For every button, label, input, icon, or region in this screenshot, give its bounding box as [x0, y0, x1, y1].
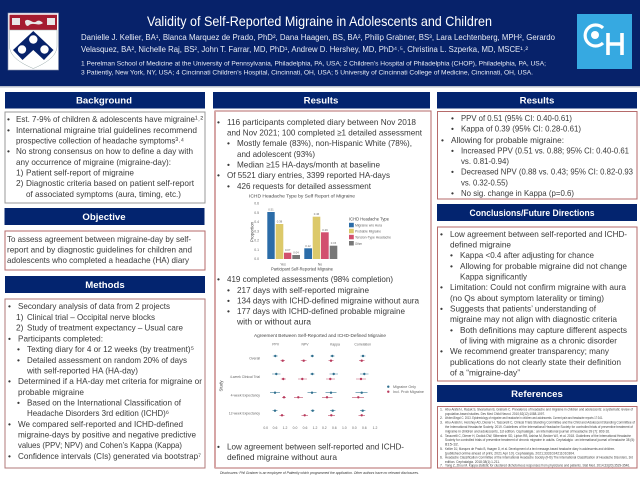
objective text: [7, 234, 192, 265]
heading: background: [5, 92, 205, 108]
forest plot: agreement between self-reported and ICHD-defined migraine: Correlation: [354, 342, 371, 346]
results text: assessments: with or without aura: [236, 316, 311, 326]
bar chart: ICHD headache type by self-report of migraine: 0.2: [254, 238, 259, 242]
methods text: Participants completed:: [18, 334, 103, 344]
results continued text: •: [451, 166, 454, 176]
forest plot: agreement between self-reported and ICHD-defined migraine: 4-week Clinical Trial: [230, 375, 260, 379]
methods text: •: [8, 419, 11, 429]
conclusions text: Low agreement between self-reported and ICHD-: [450, 229, 627, 239]
methods text: migraine-days by positive and negative predictive: [18, 430, 196, 440]
methods text: values (PPV; NPV) and Cohen’s Kappa (Kappa): [18, 440, 182, 450]
bar chart: ICHD headache type by self-report of migraine: 0.0: [254, 257, 259, 261]
forest plot: agreement between self-reported and ICHD-defined migraine: 1.2: [313, 426, 317, 430]
bar chart: ICHD headache type by self-report of migraine: ICHD Headache Type by Self Report of Migraine: [249, 194, 356, 198]
heading: methods: Methods: [85, 280, 125, 291]
conclusions text: Kappa <0.4 after adjusting for chance: [460, 250, 594, 260]
results text: participants: •: [217, 170, 220, 180]
methods text: •: [8, 376, 11, 386]
bar chart: ICHD headache type by self-report of migraine: 0.12: [305, 244, 311, 248]
references text: [440, 408, 635, 468]
conclusions text: Both definitions may capture different aspects: [460, 325, 627, 335]
forest plot: agreement between self-reported and ICHD-defined migraine: Study: [218, 380, 224, 392]
panel: references: [437, 385, 637, 468]
results text: assessments: 217 days with self-reported migraine: [237, 285, 369, 295]
conclusions text: •: [440, 229, 443, 239]
background text: •: [7, 125, 10, 135]
panel: background: [5, 92, 205, 203]
results text: participants: and adolescent (93%): [237, 149, 315, 159]
conclusions text: Suggests that patients’ understanding of: [450, 304, 597, 314]
bar chart: ICHD headache type by self-report of migraine: 0.07: [285, 248, 291, 252]
heading: objective: Objective: [82, 212, 126, 223]
results text box: [214, 111, 431, 468]
conclusions text: [440, 229, 627, 378]
conclusions text: •: [450, 261, 453, 271]
results text: participants: •: [227, 181, 230, 191]
results text: participants: and Nov 2021; 100 completed ≥1 detailed assessment: [227, 128, 423, 138]
bar chart: ICHD headache type by self-report of migraine: 0.4: [254, 220, 259, 224]
bar chart: ICHD headache type by self-report of migraine: Probable Migraine: [355, 230, 381, 234]
heading: results continued: Results: [520, 96, 554, 106]
results continued text: •: [441, 135, 444, 145]
forest plot: agreement between self-reported and ICHD-defined migraine: Migraine Only: [393, 385, 416, 389]
methods text: Based on the International Classification of: [27, 398, 182, 408]
background text: Diagnostic criteria based on patient self-report: [26, 178, 195, 188]
references text box: [438, 406, 637, 468]
results continued text: Increased PPV (0.51 vs. 0.88; 95% CI: 0.40-0.61: [461, 146, 629, 156]
bar chart: ICHD headache type by self-report of migraine: 0.04: [293, 250, 299, 254]
forest plot: agreement between self-reported and ICHD-defined migraine: 4-week Expectancy: [231, 394, 260, 398]
conclusions text: Kappa significantly: [460, 272, 528, 282]
background text: 1): [16, 168, 24, 178]
background text: any occurrence of migraine (migraine-day):: [16, 157, 171, 167]
background text: International migraine trial guidelines recommend: [16, 125, 197, 135]
panel: methods: [5, 276, 205, 468]
results text: assessments: •: [227, 285, 230, 295]
bar chart: ICHD headache type by self-report of migraine: No: [318, 262, 322, 266]
forest plot: agreement between self-reported and ICHD-defined migraine: 0.6: [303, 426, 307, 430]
methods text: •: [8, 334, 11, 344]
forest plot: agreement between self-reported and ICHD-defined migraine: Overall: [249, 356, 260, 360]
methods text: Clinical trial – Occipital nerve blocks: [27, 312, 155, 322]
panel: objective: [4, 208, 205, 270]
results text: participants: [217, 117, 423, 191]
forest plot: agreement between self-reported and ICHD-defined migraine: 1.2: [283, 426, 287, 430]
heading: results: [213, 92, 430, 108]
forest plot: agreement between self-reported and ICHD-defined migraine: 0.6: [362, 426, 367, 430]
heading: results: Results: [304, 96, 338, 106]
references text: population-based studies. Dev Med Child Neurol. 2010;52(12):1088-1097.: [445, 412, 545, 416]
results text: participants: •: [227, 138, 230, 148]
bar chart: ICHD headache type by self-report of migraine: 0.3: [254, 229, 259, 233]
authors: Danielle J. Kellier, BA¹, Blanca Marquez de Prado, PhD², Dana Haagen, BS, BA², Philip Grabner, BS³, Lara Lechtenberg, MPH², Gerardo: [81, 33, 556, 42]
results continued text: No sig. change in Kappa (p=0.6): [461, 188, 574, 198]
objective text box: [5, 231, 205, 270]
bar chart: ICHD headache type by self-report of migraine: 0.15: [331, 241, 337, 245]
conclusions text: Allowing for probable migraine did not change: [460, 261, 627, 271]
conclusions text: We recommend greater transparency; many: [450, 346, 610, 356]
forest plot: agreement between self-reported and ICHD-defined migraine: NPV: [302, 342, 309, 346]
bar chart: ICHD headache type by self-report of migraine: 0.5: [254, 211, 259, 215]
references text: edition. Cephalalgia. 2018;38(1):1-211.: [445, 460, 500, 464]
conclusions text: •: [450, 325, 453, 335]
results text: assessments: •: [227, 296, 230, 306]
title: Validity of Self-Reported Migraine in Adolescents and Children: [147, 13, 492, 29]
methods text: •: [8, 301, 11, 311]
heading: results continued: [437, 92, 637, 108]
objective text: adolescents who completed a headache (HA) diary: [7, 255, 190, 265]
methods text: [8, 301, 202, 461]
bar chart: ICHD headache type by self-report of migraine: 0.1: [254, 248, 259, 252]
results continued text: •: [451, 124, 454, 134]
conclusions text: Limitation: Could not confirm migraine with aura: [450, 282, 626, 292]
bar chart: ICHD headache type by self-report of migraine: 0.51: [268, 208, 274, 212]
conclusions text: of living with migraine as a chronic disorder: [460, 336, 617, 346]
results continued text box: [438, 112, 637, 199]
methods text: with self-reported HA (HA-day): [26, 366, 138, 376]
conclusions text: of a “migraine-day”: [450, 368, 520, 378]
results continued text: [441, 113, 633, 198]
conclusions text box: [438, 227, 637, 381]
authors: [81, 33, 556, 54]
references text: 815-32.: [445, 442, 459, 446]
heading: methods: [5, 276, 205, 293]
results text: participants: Of 5521 diary entries, 3399 reported HA-days: [227, 170, 390, 180]
affiliations: 1 Perelman School of Medicine at the University of Pennsylvania, Philadelphia, PA, USA; 2 Children’s Hospital of Philadelphia (CHOP), Philadelphia, PA, USA;: [81, 60, 546, 68]
heading: conclusions: [437, 204, 637, 221]
bar chart: ICHD headache type by self-report of migraine: Tension-Type Headache: [355, 236, 391, 240]
references text: 2.: [440, 416, 443, 420]
heading: conclusions: Conclusions/Future Directions: [470, 208, 594, 219]
conclusions text: (no Qs about symptom laterality or timing): [450, 293, 604, 303]
forest plot: agreement between self-reported and ICHD-defined migraine: PPV: [272, 342, 280, 346]
heading: references: References: [511, 389, 563, 400]
panel: results (right): [437, 92, 637, 199]
references text: 3.: [440, 420, 443, 424]
results text: low agreement: Low agreement between self-reported and ICHD-: [227, 442, 404, 452]
results continued text: Allowing for probable migraine:: [451, 135, 564, 145]
background text: 2): [16, 178, 24, 188]
results continued text: •: [451, 146, 454, 156]
references text: 7.: [440, 464, 443, 468]
forest plot: agreement between self-reported and ICHD-defined migraine: 1.2: [373, 426, 377, 430]
objective text: To assess agreement between migraine-day by self-: [7, 234, 191, 244]
references text: 1.: [440, 408, 443, 412]
background text box: [5, 112, 205, 203]
results continued text: Kappa of 0.39 (95% CI: 0.28-0.61): [461, 124, 581, 134]
bar chart: ICHD headache type by self-report of migraine: Migraine w/o Aura: [355, 224, 382, 228]
background text: of associated symptoms (aura, timing, etc.): [26, 189, 181, 199]
results continued text: •: [451, 113, 454, 123]
methods text: Headache Disorders 3rd edition (ICHD)⁶: [27, 408, 169, 418]
results text: assessments: 134 days with ICHD-defined migraine without aura: [237, 296, 419, 306]
methods text: •: [17, 355, 20, 365]
methods text: Detailed assessment on random 20% of days: [27, 355, 187, 365]
results text: assessments: •: [217, 274, 220, 284]
forest plot: agreement between self-reported and ICHD-defined migraine: Incl. Prob Migraine: [393, 390, 424, 394]
methods text: Determined if a HA-day met criteria for migraine or: [18, 376, 202, 386]
methods text: •: [8, 451, 11, 461]
background text: •: [7, 146, 10, 156]
bar chart: ICHD headache type by self-report of migraine: 0.38: [277, 220, 283, 224]
heading: background: Background: [76, 96, 132, 106]
results text: participants: 116 participants completed diary between Nov 2018: [227, 117, 416, 127]
results text: assessments: [217, 274, 419, 326]
bar chart: ICHD headache type by self-report of migraine: Participant Self-Reported Migraine: [271, 266, 334, 272]
results text: assessments: 419 completed assessments (98% completion): [227, 274, 393, 284]
logo: CH: [577, 14, 632, 69]
forest plot: agreement between self-reported and ICHD-defined migraine: 0.0: [293, 426, 297, 430]
forest plot: agreement between self-reported and ICHD-defined migraine: 0.0: [352, 426, 357, 430]
results text: low agreement: •: [217, 442, 220, 452]
results text: participants: Mostly female (83%), non-Hispanic White (78%),: [237, 138, 412, 148]
conclusions text: •: [440, 346, 443, 356]
forest plot: agreement between self-reported and ICHD-defined migraine: 12-week Expectancy: [229, 412, 260, 416]
results continued text: vs. 0.81-0.94): [461, 156, 509, 166]
affiliations: [81, 60, 546, 76]
results text: low agreement: [217, 442, 404, 462]
methods text: 1): [16, 312, 24, 322]
forest plot: agreement between self-reported and ICHD-defined migraine: 0.6: [273, 426, 277, 430]
background text: No strong consensus on how to define a day with: [16, 146, 193, 156]
logo: university shield: [8, 13, 58, 70]
background text: Patient self-report of migraine: [26, 168, 134, 178]
bar chart: ICHD headache type by self-report of migraine: 0.6: [254, 202, 259, 206]
forest plot: agreement between self-reported and ICHD-defined migraine: 0.6: [332, 426, 337, 430]
heading: objective: [4, 208, 204, 225]
heading: references: [437, 385, 637, 402]
results continued text: PPV of 0.51 (95% CI: 0.40-0.61): [461, 113, 572, 123]
panel: conclusions: [437, 204, 637, 381]
bar chart: ICHD headache type by self-report of migraine: 0.29: [322, 228, 328, 232]
references text: migraine in children and adolescents, 1st edition. Cephalalgia : an international journal of headache 39 (7): 803-16.: [445, 429, 610, 433]
header banner: [0, 0, 640, 88]
affiliations: 3 Patiently, New York, NY, USA; 4 Cincinnati Children’s Hospital, Cincinnati, OH, USA; 5 University of Cincinnati College of Medicine, Cincinnati, OH, USA.: [81, 70, 533, 76]
bar chart: ICHD headache type by self-report of migraine: 0.46: [314, 212, 320, 216]
results text: participants: •: [217, 117, 220, 127]
forest plot: agreement between self-reported and ICHD-defined migraine: Kappa: [330, 342, 340, 346]
methods text: Secondary analysis of data from 2 projects: [18, 301, 170, 311]
conclusions text: •: [450, 250, 453, 260]
results text: participants: 426 requests for detailed assessment: [237, 181, 372, 191]
results continued text: vs. 0.32-0.55): [461, 178, 508, 188]
references text: 6.: [440, 456, 443, 460]
background text: •: [7, 114, 10, 124]
background text: prospective collection of headache symptoms³˒⁴: [16, 136, 184, 146]
references text: 5.: [440, 447, 443, 451]
background text: [7, 114, 203, 199]
methods text: Confidence intervals (CIs) generated via bootstrap⁷: [18, 451, 201, 461]
methods text: •: [17, 344, 20, 354]
disclosure note: Disclosures: Phil Grabner is an employee of Patiently which programmed the application. Other authors have no relevant disclosures.: [220, 471, 419, 475]
results continued text: •: [451, 188, 454, 198]
bar chart: ICHD headache type by self-report of migraine: [249, 194, 391, 272]
methods text: probable migraine: [18, 387, 84, 397]
background text: Est. 7-9% of children & adolescents have migraine¹˒²: [16, 114, 203, 124]
conclusions text: migraine may not align with diagnostic criteria: [450, 314, 617, 324]
conclusions text: publications do not clearly state their definition: [450, 357, 621, 367]
forest plot: agreement between self-reported and ICHD-defined migraine: Agreement Between Self-Reported and ICHD-Defined Migraine: [254, 333, 387, 338]
bar chart: ICHD headache type by self-report of migraine: Proportion: [250, 221, 254, 242]
methods text box: [5, 299, 205, 468]
conclusions text: •: [440, 282, 443, 292]
references text: [published online ahead of print, 2021 Apr 10]. Cephalalgia. 2021;3331024211010304.: [445, 451, 575, 455]
results text: low agreement: defined migraine without aura: [227, 452, 337, 462]
results text: assessments: 177 days with ICHD-defined probable migraine: [237, 306, 405, 316]
results text: participants: Median ≥15 HA-days/month at baseline: [237, 160, 380, 170]
references text: 4.: [440, 434, 443, 438]
bar chart: ICHD headache type by self-report of migraine: Other: [355, 242, 363, 246]
methods text: •: [17, 398, 20, 408]
methods text: 2): [16, 322, 24, 332]
methods text: We compared self-reported and ICHD-defined: [18, 419, 183, 429]
bar chart: ICHD headache type by self-report of migraine: Yes: [280, 262, 286, 266]
panel: results (middle): [213, 92, 431, 468]
forest plot: agreement between self-reported and ICHD-defined migraine: 0.0: [263, 426, 268, 430]
forest plot: agreement between self-reported and ICHD-defined migraine: 0.2: [322, 426, 327, 430]
results text: assessments: •: [227, 306, 230, 316]
conclusions text: defined migraine: [450, 240, 511, 250]
methods text: Texting diary for 4 or 12 weeks (by treatment)⁵: [27, 344, 194, 354]
forest plot: agreement between self-reported and ICHD-defined migraine: [218, 333, 424, 430]
bar chart: ICHD headache type by self-report of migraine: ICHD Headache Type: [349, 216, 390, 222]
conclusions text: •: [440, 304, 443, 314]
results text: participants: •: [227, 160, 230, 170]
authors: Velasquez, BA², Nichelle Raj, BS², John T. Farrar, MD, PhD¹, Andrew D. Hershey, MD, PhD⁴˒⁵, Christina L. Szperka, MD, MSCE¹˒²: [81, 45, 528, 54]
methods text: Study of treatment expectancy – Usual care: [27, 322, 183, 332]
forest plot: agreement between self-reported and ICHD-defined migraine: 1.0: [342, 426, 347, 430]
objective text: report and by diagnostic guidelines for children and: [7, 244, 192, 254]
